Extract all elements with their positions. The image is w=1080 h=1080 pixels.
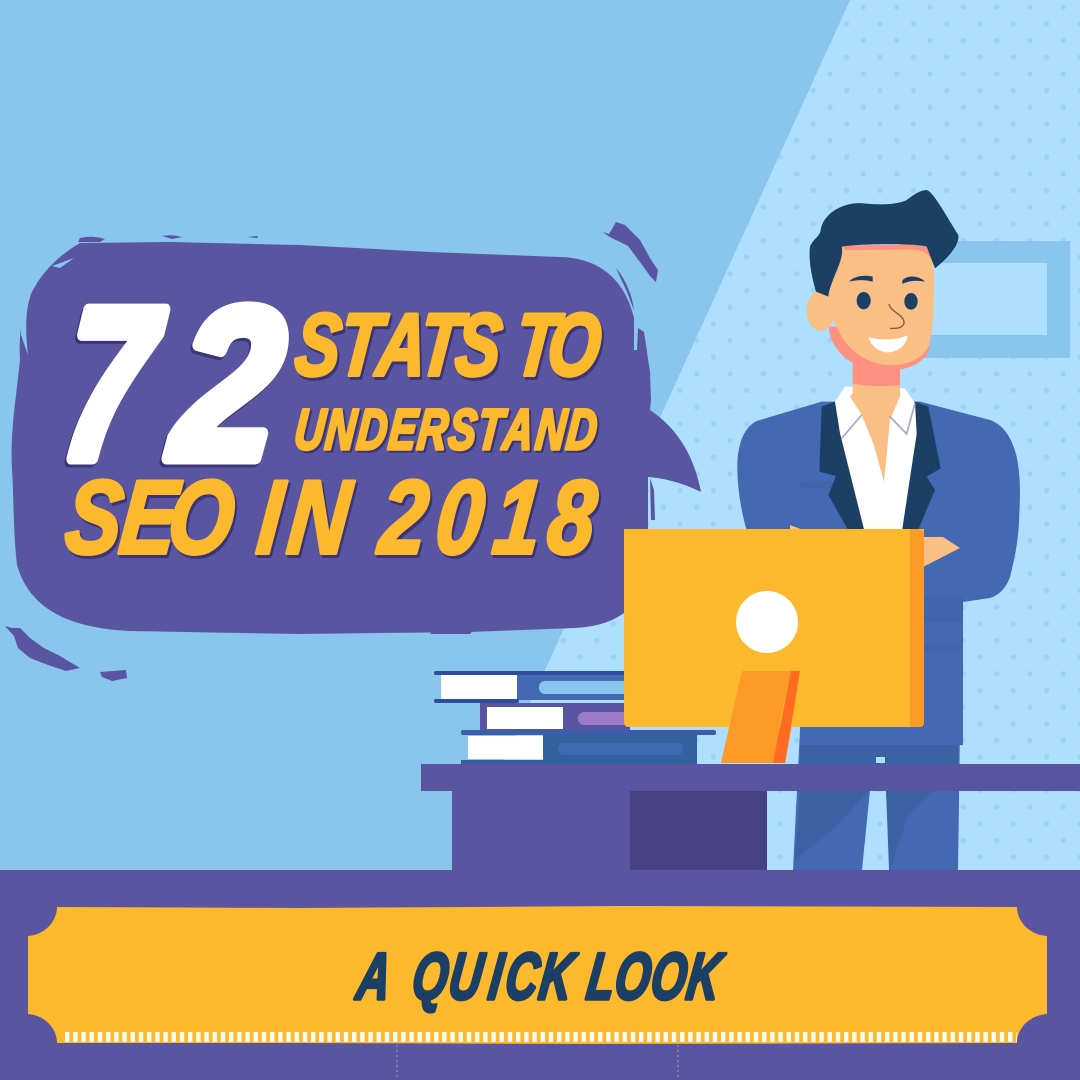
desk bbox=[421, 764, 1080, 870]
number shadow: 7 bbox=[51, 267, 169, 507]
smile bbox=[869, 335, 908, 352]
heading shadow: SEO IN 2018 bbox=[63, 462, 604, 579]
top book bbox=[434, 671, 629, 703]
heading shadow bbox=[63, 298, 608, 579]
hair bbox=[810, 190, 959, 297]
monitor stand front bbox=[721, 671, 791, 763]
monitor screen bbox=[624, 529, 924, 727]
heading yellow lines: SEO IN 2018 bbox=[61, 459, 602, 576]
lapels bbox=[819, 402, 941, 533]
heading yellow lines: STATS TO bbox=[291, 295, 606, 394]
middle book bbox=[480, 703, 630, 731]
number white: 2 bbox=[161, 263, 293, 504]
number shadow bbox=[51, 266, 291, 507]
banner text: A QUICK LOOK bbox=[351, 941, 729, 1014]
number white: 7 bbox=[53, 264, 171, 504]
collar lines bbox=[842, 403, 915, 438]
heading yellow lines bbox=[61, 295, 606, 576]
shirt bbox=[835, 387, 917, 533]
speech bubble bbox=[12, 235, 701, 634]
bottom book bbox=[461, 730, 716, 764]
face bbox=[829, 245, 934, 365]
floor band bbox=[0, 870, 1080, 1080]
heading shadow: STATS TO bbox=[293, 298, 608, 397]
heading shadow: UNDERSTAND bbox=[294, 400, 602, 464]
neck bbox=[850, 360, 900, 482]
monitor side bbox=[910, 529, 924, 727]
neck shadow bbox=[853, 362, 900, 386]
jacket fold shade bbox=[800, 482, 963, 651]
monitor stand highlight bbox=[773, 671, 800, 763]
brush splatter bottom left bbox=[5, 626, 127, 681]
jacket bbox=[737, 402, 1020, 745]
books stack bbox=[434, 671, 716, 764]
number white bbox=[53, 263, 293, 504]
number shadow: 2 bbox=[159, 266, 291, 507]
monitor bbox=[624, 529, 924, 763]
man lower body trousers bbox=[793, 730, 960, 870]
forehead shadow bbox=[842, 244, 932, 260]
light dotted wall panel bbox=[454, 0, 1080, 870]
eyes bbox=[857, 292, 918, 310]
face shadow bbox=[829, 327, 930, 371]
eyebrows bbox=[849, 276, 925, 284]
monitor logo dot bbox=[736, 591, 798, 653]
wall picture frame bbox=[900, 241, 1070, 358]
heading yellow lines: UNDERSTAND bbox=[292, 398, 600, 462]
nose bbox=[889, 304, 904, 328]
ear bbox=[807, 291, 835, 331]
brush splatter top right bbox=[603, 222, 658, 282]
dotted connector lines bbox=[397, 1045, 678, 1080]
man bbox=[737, 190, 1020, 745]
heading number 72 bbox=[51, 263, 293, 507]
monitor stand bbox=[721, 671, 802, 763]
crossed arm hand bbox=[790, 525, 960, 567]
ribbon banner bbox=[28, 906, 1047, 1044]
